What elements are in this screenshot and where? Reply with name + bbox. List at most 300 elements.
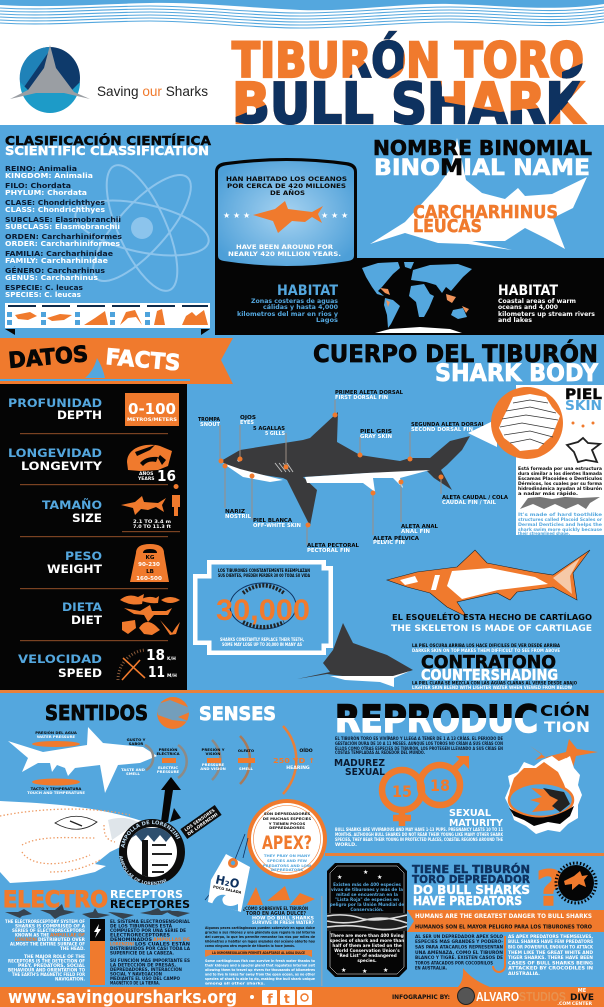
habitat text English: Coastal areas of warm (498, 298, 576, 305)
badge text Spanish: POR CERCA DE 420 MILLONES (227, 184, 346, 190)
predators text English: TIGER SHARKS. THERE HAVE BEEN (508, 955, 593, 961)
predators text English: CASES OF BULL SHARKS BEING (508, 960, 593, 966)
fact: weight (47, 544, 169, 582)
heading: predators: TORO DEPREDADOR (412, 873, 531, 886)
taxonomy list: GENUS: Carcharhinus (5, 274, 98, 282)
fact: speed: 11 (148, 663, 165, 681)
anatomy callouts: FIRST DORSAL FIN (335, 395, 388, 401)
skin text Spanish: Dérmicos, los cuales por su forma (518, 480, 602, 487)
taxonomy list: SUBCLASE: Elasmobranchii (5, 216, 121, 224)
electroreception text English: NAVIGATION. (55, 976, 85, 982)
skin scale magnifier (491, 387, 563, 459)
me dive center logo: DIVE (570, 993, 594, 1003)
heading: reproduction (337, 702, 588, 734)
fact: speed: SPEED (58, 666, 102, 680)
reproduction text English: SPECIES, THEY BEAR THEIR YOUNG IN PROTECTED PLACES, COASTAL REGIONS AROUND THE (335, 837, 503, 842)
electroreception text English: PREY, PREDATORS, SOCIAL (18, 963, 85, 968)
freshwater text English: Some cartilaginous fish can survive in fresh water thanks to (205, 959, 315, 963)
electroreception text Spanish: DISTRIBUIDOS POR CASI TODA LA (110, 946, 191, 951)
freshwater text Spanish (205, 926, 316, 948)
fact: speed: 18 (146, 646, 165, 664)
predators text Spanish (415, 934, 503, 972)
fact: longevity: 16 (157, 467, 176, 485)
skin text Spanish: Está formada por una estructura (518, 465, 602, 472)
predators text English: THEM LIKE THE GREAT WHITE AND (508, 950, 593, 956)
senses labels and arcs: 250 YD ↑ (273, 757, 315, 765)
row of small sharks (5, 904, 190, 919)
icon: denticle (567, 438, 600, 462)
skin text English: Dermal Denticles and helps the (518, 522, 602, 528)
senses labels and arcs: TACTO Y TEMPERATURA (31, 786, 81, 791)
heading: electroreceptors: RECEPTORS (110, 889, 183, 901)
magnifier: ampullae of Lorenzini (119, 819, 185, 885)
anatomy callouts: PECTORAL FIN (307, 548, 350, 554)
heading: senses: SENTIDOS (45, 701, 148, 725)
heading: reproduction: TION (544, 720, 590, 736)
taxonomy list: ESPECIE: C. leucas (5, 284, 83, 292)
plaque: endangered species: ★ (363, 869, 368, 876)
social icons: t (284, 992, 290, 1006)
plaque text English: "Red List" of endangered (337, 953, 397, 958)
panel: skin (468, 385, 604, 537)
tag: H2O freshwater: H₂O (214, 872, 241, 891)
panel: facts black column (0, 384, 187, 690)
fact: size: TAMAÑO (42, 497, 102, 512)
fact: size: SIZE (72, 511, 102, 525)
icon: spiky predator circle (556, 863, 596, 903)
ribbon corners (5, 329, 210, 335)
me dive center logo: ME (578, 988, 587, 994)
taxonomy list: REINO: Animalia (5, 165, 77, 173)
reproduction text Spanish: COSTAS TEMPLADAS AL REDEDOR DEL MUNDO. (335, 750, 425, 755)
panel: facts header ribbon (0, 335, 604, 384)
fact: speed: M/H (167, 673, 177, 679)
anatomy callouts: SEGUNDA ALETA DORSAL (411, 422, 485, 428)
freshwater text Spanish: del cuerpo, lo que les permite remontar los ríos por miles de (205, 935, 315, 939)
heading: predators: TIENE EL TIBURÓN (412, 863, 530, 876)
eye (55, 816, 97, 829)
skin heading: PIEL (565, 387, 602, 403)
electroreception text Spanish: LA DETECCIÓN DE PRESAS, (110, 962, 176, 968)
plaque text Spanish: "Lista Roja" de especies en (335, 897, 399, 902)
orange banner: osmoregulation: LA OSMORREGULACIÓN PERMITE ADAPTARSE AL AGUA DULCE (212, 950, 305, 955)
fact: size: 2.1 TO 3.4 m (133, 519, 171, 525)
senses labels and arcs: VISIÓN (206, 751, 220, 756)
heading: electroreceptors (3, 888, 190, 913)
predators text Spanish: UNA AMENAZA, COMO EL TIBURÓN (415, 949, 503, 956)
freshwater heading: TORO EN AGUA DULCE? (246, 911, 306, 917)
footer band (0, 987, 604, 1007)
fact: longevity: AÑOS (139, 470, 153, 477)
apex circle (247, 799, 327, 879)
plaque photo strip (327, 913, 407, 931)
heading: predators: HAVE PREDATORS (413, 894, 522, 908)
wave stripes (0, 0, 604, 28)
skin text English: structures called Placoid Scales or (518, 517, 603, 523)
orange freshwater sharks (247, 886, 315, 905)
fact: longevity: LONGEVITY (21, 459, 103, 473)
reproduction text English: MONTHS. ALTHOUGH BULL SHARKS DO NOT REAR THEIR YOUNG LIKE MANY OTHER SHARK (335, 832, 504, 837)
countershading text: LA PIEL OSCURA ARRIBA LOS HACE DIFICILES DE VER DESDE ARRIBA (412, 643, 561, 649)
predators text Spanish: ESPECIES MAS GRANDES Y PODERO- (415, 939, 503, 945)
species name (413, 202, 558, 237)
senses white shark (8, 727, 157, 793)
anatomy callouts: NOSTRIL (225, 514, 251, 520)
tag: H2O freshwater: POCO SALADA (213, 885, 242, 895)
badge text English (228, 245, 341, 258)
vertical divider (321, 896, 322, 986)
electroreception text Spanish: DE LOS TIBURONES ESTÁ (110, 924, 173, 928)
electroreception text Spanish (110, 919, 191, 986)
fact: speed: VELOCIDAD (18, 652, 102, 666)
me dive center logo (557, 988, 594, 1007)
logo: Saving our Sharks (10, 45, 90, 113)
fact: depth (8, 393, 179, 426)
anatomy callouts: ALETA PECTORAL (307, 543, 359, 549)
stars: ★ (243, 211, 250, 220)
predators text Spanish: SAS PARA ATACARLOS REPRESENTAN (415, 944, 503, 950)
plaque text Spanish (330, 882, 404, 912)
electroreception text Spanish: AMPOLLAS DE (153, 937, 190, 942)
taxonomy list (5, 165, 122, 299)
taxonomy list: FAMILIA: Carcharhinidae (5, 250, 113, 258)
taxonomy list: FILO: Chordata (5, 182, 71, 190)
senses labels and arcs: ELÉCTRICA (156, 751, 180, 756)
binomial name heading (373, 136, 592, 181)
anatomy callouts: TROMPA (198, 417, 220, 423)
heading: senses (45, 697, 276, 729)
atom emblem (70, 156, 214, 300)
predators text Spanish: TOROS ATACADOS POR COCODRILOS (415, 960, 493, 966)
ticket text bottom: SOME MAY LOSE UP TO 30,000 IN MANY AS (222, 642, 302, 647)
ticket text top: LOS TIBURONES CONSTANTEMENTE REEMPLAZAN (218, 568, 310, 573)
senses labels and arcs: PRESIÓN DEL AGUA (35, 730, 77, 735)
fact: weight: WEIGHT (47, 562, 102, 576)
senses labels and arcs: PRESSURE (202, 762, 225, 767)
freshwater text English: allowing them to travel up rivers for thousands of kilometres (205, 968, 315, 972)
plaque text English: species. (357, 958, 377, 963)
stars: ★ (331, 211, 338, 220)
electroreception text Spanish: COMPUESTO POR UNA SERIE DE (110, 928, 186, 933)
pups illustration (505, 739, 598, 834)
habitat text Spanish: Zonas costeras de aguas (251, 298, 338, 305)
ticket text top: SUS DIENTES, PUEDEN PERDER 30 00 TODA SU VIDA (218, 573, 311, 578)
habitat text Spanish (237, 283, 339, 324)
electroreception text English (5, 919, 86, 982)
facts heading English: FACTS (104, 345, 181, 377)
electroreception text Spanish: MAGNÉTICO DE LA TIERRA. (110, 980, 160, 986)
electroreception text English: THE ELECTRORECEPTORY SYSTEM OF (5, 919, 85, 924)
habitat text English: HABITAT (498, 283, 558, 299)
section divider lines (0, 690, 604, 856)
habitat text English: oceans and 4,000 (498, 304, 559, 311)
plaque text English (330, 933, 404, 963)
heading: reproduction: REPRODUC (335, 698, 538, 741)
30,000 number: 30,000 (216, 594, 310, 627)
fact: diet (62, 594, 180, 635)
apex circle: DEPREDATORS (271, 867, 303, 872)
electroreception text English: AMPULLAE OF (50, 932, 85, 938)
panel: skin: SKIN (565, 399, 602, 414)
skin text English: shark swim more quickly because (518, 527, 602, 533)
credit: INFOGRAPHIC BY: (392, 994, 450, 1001)
anatomy callouts: PIEL BLANCA (253, 518, 292, 524)
fact: longevity: YEARS (137, 476, 155, 482)
senses labels and arcs: OLFATO (238, 748, 255, 753)
anatomy callouts: 5 GILLS (265, 431, 286, 437)
taxonomy list: SUBCLASS: Elasmobranchii (5, 223, 120, 231)
panel: scientific classification: SCIENTIFIC CLASSIFICATION (5, 143, 209, 158)
fact: depth: METROS/METERS (127, 417, 177, 423)
electroreception text Spanish: LOS CUALES ESTÁN (135, 942, 191, 946)
predators text English: BIG OR POWERFUL ENOUGH TO ATTACK (508, 944, 594, 950)
ampullae ribbon (180, 805, 222, 839)
freshwater text English: their kidneys and a special gland that regulates internal salt (205, 964, 315, 968)
badge text Spanish: HAN HABITADO LOS OCEANOS (226, 177, 347, 183)
panel: black habitat band (215, 258, 604, 335)
anatomy callouts (198, 390, 508, 554)
fact: weight: PESO (65, 549, 102, 563)
taxonomy list: FAMILY: Carcharhinidae (5, 257, 108, 265)
stars (223, 211, 348, 220)
fact: longevity: LONGEVIDAD (8, 446, 102, 460)
bullet (250, 995, 254, 999)
cartilage caption: THE SKELETON IS MADE OF CARTILAGE (391, 624, 592, 634)
panel: 420 million years badge (215, 158, 357, 268)
dark countershading shark (297, 623, 413, 687)
predators text Spanish: BLANCO Y TIGRE. EXISTEN CASOS DE (415, 955, 503, 961)
anatomy callouts: ALETA ANAL (401, 524, 438, 530)
scalloped womb (505, 756, 582, 834)
stars: ★ (233, 211, 240, 220)
electroreception text English: LORENZINI (15, 937, 37, 942)
reproduction text English (335, 827, 504, 847)
countershading text (412, 643, 577, 691)
plaque: endangered species: ★ (341, 967, 346, 974)
stars: ★ (321, 211, 328, 220)
predators text English: BULL SHARKS HAVE FEW PREDATORS (508, 939, 593, 945)
fact: longevity (8, 445, 176, 485)
fact: diet: DIETA (62, 600, 102, 614)
habitat text Spanish: HABITAT (277, 283, 338, 299)
electroreception text English: BEHAVIOUR AND ORIENTATION TO (8, 968, 85, 972)
fact: weight: 90-230 (138, 562, 160, 568)
senses labels and arcs: WATER PRESSURE (37, 734, 76, 739)
panel: teeth ticket (193, 560, 333, 655)
stars: ★ (223, 211, 230, 220)
heading: electroreceptors: ELECTRO (3, 888, 108, 913)
fact: size: 7.0 TO 11.3 ft (133, 524, 172, 530)
taxonomy list: ORDEN: Carcharhiniformes (5, 233, 122, 241)
apex circle: PREDATORS AND LOW (263, 863, 312, 868)
reproduction text English: WORLD. (335, 842, 357, 847)
plaque: endangered species: ★ (362, 968, 367, 975)
maturity symbols: 15 (392, 782, 412, 801)
banner: humans danger (407, 910, 604, 932)
world map (362, 262, 472, 333)
heading: senses: SENSES (199, 703, 276, 725)
freshwater text Spanish: Algunos peces cartilaginosos pueden sobrevivir en agua dulce (205, 926, 315, 930)
senses labels and arcs: OÍDO (299, 746, 313, 754)
countershading text: DARKER SKIN ON TOP MAKES THEM DIFFICULT TO SEE FROM ABOVE (412, 648, 560, 654)
senses labels and arcs: TASTE AND (121, 767, 145, 772)
stars: ★ (341, 211, 348, 220)
freshwater text English: and to live in lakes far away from the open ocean, as no other (205, 972, 315, 976)
skin text English: their streamlined shape. (518, 531, 570, 537)
taxonomy list: SPECIES: C. leucas (5, 291, 81, 299)
fact: weight: 160-500 (136, 576, 162, 582)
senses labels and arcs: PRESIÓN Y (202, 747, 225, 752)
sexual maturity Spanish: MADUREZ (334, 758, 385, 769)
senses labels and arcs (27, 726, 315, 795)
plaque text Spanish: Conservación. (350, 907, 384, 912)
binomial name heading: BINOMIAL NAME (374, 156, 590, 181)
senses labels and arcs: PRESIÓN (159, 747, 177, 752)
sexual maturity Spanish (334, 758, 386, 778)
credit emblem (458, 988, 474, 1004)
electroreception text English: RECEPTORS IS THE DETECTION OF (8, 958, 85, 964)
fact: diet: DIET (71, 613, 102, 627)
plaque text Spanish: peligro por la Unión Mundial de (330, 902, 404, 907)
me dive center logo: CENTER (572, 1001, 593, 1007)
sexual maturity English: MATURITY (449, 818, 504, 829)
habitat text English: and lakes (498, 317, 532, 324)
anatomy callouts: GRAY SKIN (360, 434, 392, 440)
question mark: ? (536, 861, 564, 917)
electroreception text English: SERIES OF ELECTRORECEPTORS (12, 928, 85, 933)
social icons (262, 990, 312, 1007)
arrow to ampullae (161, 777, 181, 822)
heading: predators: DO BULL SHARKS (413, 883, 530, 897)
electroreception text English: ALMOST THE ENTIRE SURFACE OF (10, 942, 85, 946)
banner: humans danger: HUMANOS SON EL MAYOR PELIGRO PARA LOS TIBURONES TORO (415, 924, 592, 930)
freshwater heading: HOW DO BULL SHARKS (252, 916, 314, 920)
reproduction text Spanish: EL TIBURÓN TORO ES VIVÍPARO Y LLEGA A TENER DE 1 A 13 CRÍAS. EL PERIODO DE (335, 736, 503, 741)
plaque text English: half of them are listed on the (332, 943, 402, 948)
maturity symbols: 18 (430, 776, 450, 795)
anatomy callouts: ANAL FIN (401, 529, 430, 535)
electroreception text English: THE EARTH'S MAGNETIC FIELD FOR (12, 972, 86, 977)
anatomy callouts: SNOUT (200, 422, 221, 428)
orange skeleton shark (387, 550, 590, 617)
predators text Spanish: EN AUSTRALIA. (415, 966, 447, 972)
badge text Spanish: DE AÑOS (270, 190, 305, 197)
skin text Spanish: hidrodinámica ayudan al tiburón (518, 485, 602, 492)
fact: weight: KG (146, 555, 155, 561)
electroreception text Spanish: SOCIAL Y NAVEGACIÓN (110, 972, 163, 976)
reproduction text Spanish: ELLOS COMO OTRAS ESPECIES DE TIBURÓN, LOS PROTEGEN LLEVANDO A SUS CRÍAS EN (335, 746, 503, 751)
badge text English: HAVE BEEN AROUND FOR (236, 245, 334, 251)
icon: battery bolt (90, 919, 105, 985)
electroreception text Spanish: DEPREDADORES, INTERACCIÓN (110, 967, 183, 972)
plaque text English: World Conservation Union's (334, 948, 400, 953)
anatomy callouts: ALETA CAUDAL / COLA (442, 495, 508, 501)
badge text English: NEARLY 420 MILLION YEARS. (228, 252, 341, 258)
predators text English: AUSTRALIA. (508, 971, 540, 977)
cartilage caption: EL ESQUELÉTO ESTA HECHO DE CARTÍLAGO (392, 613, 592, 622)
anatomy callouts: ALETA PÉLVICA (373, 534, 419, 542)
fact: depth: DEPTH (57, 408, 102, 422)
freshwater heading: ¿CÓMO SOBREVIVE EL TIBURÓN (243, 906, 308, 911)
electroreception text English: DISTRIBUTED OVER (38, 937, 86, 942)
freshwater text Spanish: kilómetros y habitar en lagos alejados del océano abierto hoy (205, 940, 316, 944)
heading: predators (412, 863, 531, 908)
electroreception text Spanish: DENOMINADOS (110, 937, 152, 942)
logo wordmark: Saving our Sharks (97, 83, 208, 99)
electroreception text English: SHARKS IS COMPRISED OF A (15, 924, 86, 928)
ampullae ribbon: LOS SENSORES (183, 808, 216, 832)
shark head close-up (0, 801, 145, 883)
plaque text English: species of shark and more than (330, 938, 404, 943)
icon: orange shark (253, 201, 323, 233)
taxonomy list: ORDER: Carcharhiniformes (5, 240, 120, 248)
habitat text Spanish: cálidas y hasta 4,000 (263, 303, 339, 311)
anatomy callouts: CAUDAL FIN / TAIL (442, 500, 496, 506)
sexual maturity English: SEXUAL (449, 808, 492, 819)
binomial name heading: NOMBRE BINOMIAL (373, 136, 592, 160)
electroreception text Spanish: SU FUNCIÓN MÁS IMPORTANTE ES (110, 958, 190, 963)
anatomy callouts: NARIZ (225, 509, 246, 515)
fact: weight: LB (146, 569, 154, 575)
header band (0, 0, 604, 125)
fact: depth: PROFUNIDAD (8, 396, 102, 410)
main shark anatomy illustration (221, 412, 470, 526)
apex circle: SPECIES AND FEW (267, 858, 308, 863)
plaque text English: There are more than 400 living (330, 933, 404, 938)
electroreception text Spanish: LORENZINI (110, 942, 134, 946)
freshwater text Spanish: gracias a sus riñones y una glándula que regula la sal interna (205, 930, 315, 934)
senses labels and arcs: ELECTRIC (158, 765, 178, 770)
senses labels and arcs: AND VISION (200, 766, 226, 771)
habitat text Spanish: kilometros del mar en rios y (237, 311, 338, 318)
badge text Spanish (226, 177, 347, 197)
skin text Spanish (518, 465, 602, 497)
plaque: endangered species: ★ (383, 967, 388, 974)
senses labels and arcs: PRESSURE (157, 769, 180, 774)
electroreception text Spanish: EL SISTEMA ELECTROSENSORIAL (110, 919, 190, 924)
countershading text: CONTRATONO (421, 652, 556, 673)
binomial white shark (370, 138, 587, 250)
heading: shark body (313, 338, 599, 387)
me dive center logo: .COM (557, 1001, 571, 1007)
plaque text Spanish: mitad se encuentran en la (336, 892, 398, 897)
plaque: endangered species: ★ (377, 874, 382, 881)
anatomy callouts: OJOS (240, 415, 257, 421)
title (232, 32, 586, 137)
freshwater text English: among all other sharks. (205, 982, 265, 986)
fin cut-out (85, 358, 105, 378)
anatomy callouts: PRIMER ALETA DORSAL (335, 390, 403, 396)
taxonomy list: KINGDOM: Animalia (5, 172, 93, 180)
skin text Spanish: Escamas Placoides o Denticulos (518, 476, 602, 482)
orange shark (530, 739, 598, 768)
predators text Spanish: AL SER UN DEPREDADOR APEX SOLO (415, 934, 503, 940)
skin text Spanish: a nadar más rápido. (518, 490, 578, 497)
electroreception text Spanish: MEDIANTE EL USO DEL CAMPO (110, 976, 181, 981)
countershading text: COUNTERSHADING (421, 666, 558, 684)
ticket text top (218, 568, 311, 578)
anatomy callouts: PELVIC FIN (373, 540, 405, 546)
ampullae ribbon: DE LORENZINI (186, 811, 219, 836)
ticket text bottom (220, 637, 304, 647)
anatomy callouts: PIEL GRIS (360, 429, 393, 435)
orange banner: osmoregulation (205, 950, 312, 957)
fact: size (42, 484, 180, 532)
freshwater heading (243, 906, 315, 925)
plaque text Spanish: vivas de tiburones y más de la (331, 887, 403, 892)
skin text English: It's made of hard toothlike (518, 512, 602, 518)
habitat text Spanish: Lagos (316, 317, 338, 324)
